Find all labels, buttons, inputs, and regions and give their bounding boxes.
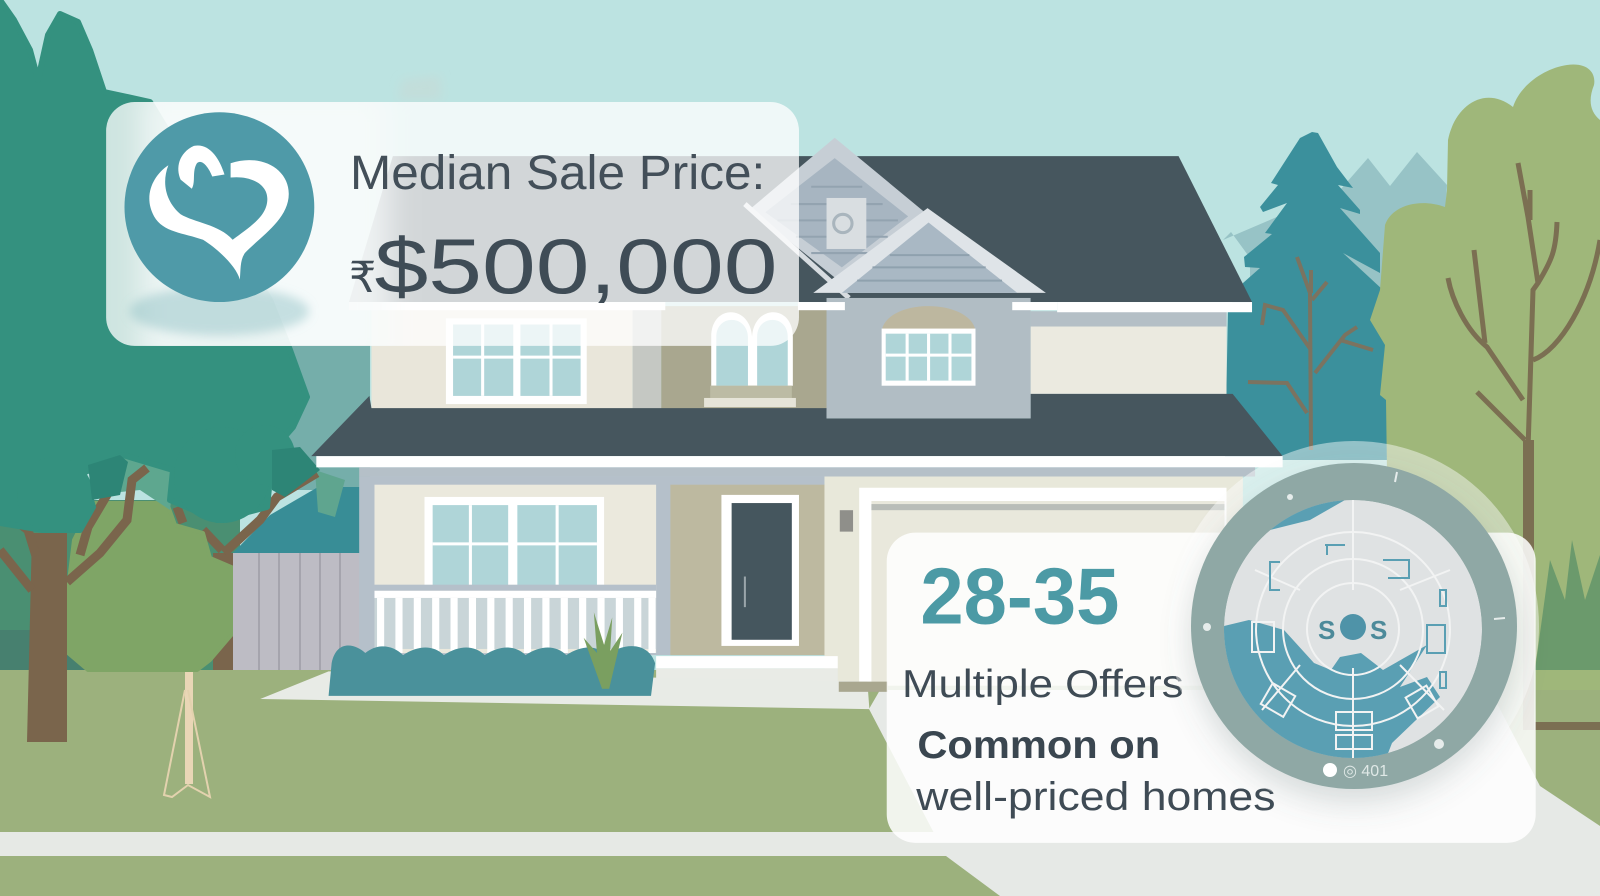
right upper wall	[1031, 302, 1252, 394]
grass plant	[584, 612, 622, 689]
green canopy	[0, 0, 307, 533]
card background	[887, 533, 1536, 843]
tree: teal pine	[1225, 132, 1395, 460]
steps and walkway	[260, 656, 888, 709]
label: multiple offers: Multiple Offers	[902, 663, 1184, 706]
label: common on: Common on	[917, 724, 1160, 767]
lower roof	[311, 394, 1283, 456]
canopy gap patches	[90, 455, 175, 510]
upper left window	[446, 318, 587, 404]
upper roof	[349, 156, 1252, 302]
dial dots	[1203, 472, 1505, 749]
value: 28-35: 28-35	[920, 551, 1119, 640]
card background	[106, 102, 799, 346]
icon: teal circle with heart	[124, 112, 314, 302]
dial: SOS floor-plan circle	[1169, 441, 1539, 811]
tree: pine background	[1223, 152, 1447, 300]
value: price: ₹	[349, 254, 376, 302]
lower front window	[424, 497, 604, 589]
dial ring	[1191, 463, 1517, 789]
dial caption	[1323, 763, 1388, 780]
tree trunk and branches	[0, 468, 147, 742]
dial face	[1224, 500, 1482, 758]
green shrub	[68, 503, 250, 670]
fence	[233, 553, 362, 670]
halo	[1169, 441, 1539, 811]
value: price: $500,000	[374, 224, 778, 310]
front gable	[798, 208, 1057, 418]
tree: right green tree	[1370, 65, 1600, 730]
faint chimney above card	[398, 75, 442, 100]
teal hedge	[329, 646, 655, 696]
sapling stake	[164, 672, 210, 797]
text: SOS	[1318, 614, 1386, 640]
wall lamp	[840, 510, 853, 532]
ground lawn	[0, 670, 1600, 896]
icon shadow	[130, 287, 309, 336]
dial caption: ◎ 401	[1343, 763, 1388, 780]
canopy shading	[88, 447, 320, 500]
text: SOS: S	[1318, 615, 1335, 645]
label: well-priced homes: well-priced homes	[915, 775, 1275, 819]
porch railing	[374, 585, 656, 653]
panel: median sale price card	[106, 102, 799, 346]
arched window	[704, 312, 796, 407]
upper left wall	[349, 302, 830, 410]
gable window	[882, 329, 976, 386]
rear gable	[745, 138, 923, 298]
front door	[721, 495, 799, 646]
tree: left canopy and trunk	[0, 0, 320, 742]
dial shadow	[1189, 475, 1519, 805]
roof fascia	[316, 456, 1283, 477]
tree: second trunk	[177, 473, 317, 670]
text: SOS: S	[1370, 615, 1387, 645]
blurred underlay softening tree edge behind card	[140, 90, 390, 370]
gable vent	[827, 198, 866, 249]
lower walls	[359, 477, 1243, 686]
label: median sale price: Median Sale Price:	[350, 147, 765, 200]
house	[260, 138, 1283, 709]
panel: multiple offers card	[887, 533, 1536, 843]
background hedge band behind house	[0, 345, 370, 670]
